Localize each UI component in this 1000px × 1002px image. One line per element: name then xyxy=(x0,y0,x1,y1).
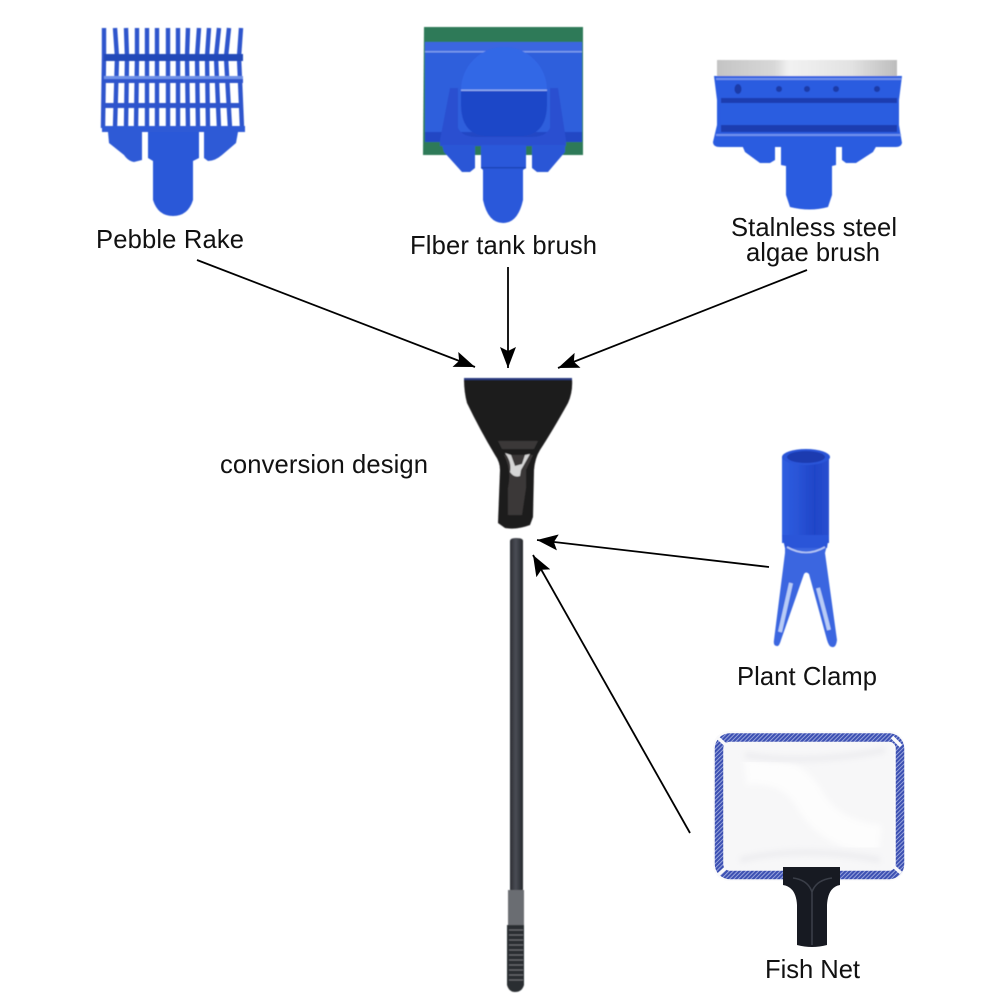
label: Pebble Rake: Pebble Rake xyxy=(96,226,244,254)
label: Fish Net: Fish Net xyxy=(765,956,860,984)
label: Stainless steel algae brush xyxy=(731,214,897,267)
label: Stainless steel algae brush: algae brush xyxy=(746,239,880,267)
icon: stainless steel algae brush xyxy=(713,60,902,210)
label: Stainless steel algae brush: Stalnless steel xyxy=(731,214,897,242)
label: Fiber tank brush: Flber tank brush xyxy=(410,232,597,260)
arrow: fish net to pole xyxy=(533,555,690,833)
icon: fiber tank brush xyxy=(423,27,583,223)
icon: black conversion adapter xyxy=(464,379,572,529)
icon: telescopic pole xyxy=(507,538,524,992)
arrow: steel brush to adapter xyxy=(558,270,807,368)
label: Plant Clamp: Plant Clamp xyxy=(737,663,877,691)
arrow: rake to adapter xyxy=(197,260,475,367)
icon: plant clamp xyxy=(774,449,837,647)
arrow: fiber brush to adapter xyxy=(507,267,509,368)
icon: pebble rake xyxy=(102,28,245,216)
arrow: plant clamp to pole xyxy=(537,540,769,567)
frame bracket xyxy=(440,88,566,146)
label: conversion design: conversion design xyxy=(220,451,428,479)
icon: fish net xyxy=(713,731,905,947)
